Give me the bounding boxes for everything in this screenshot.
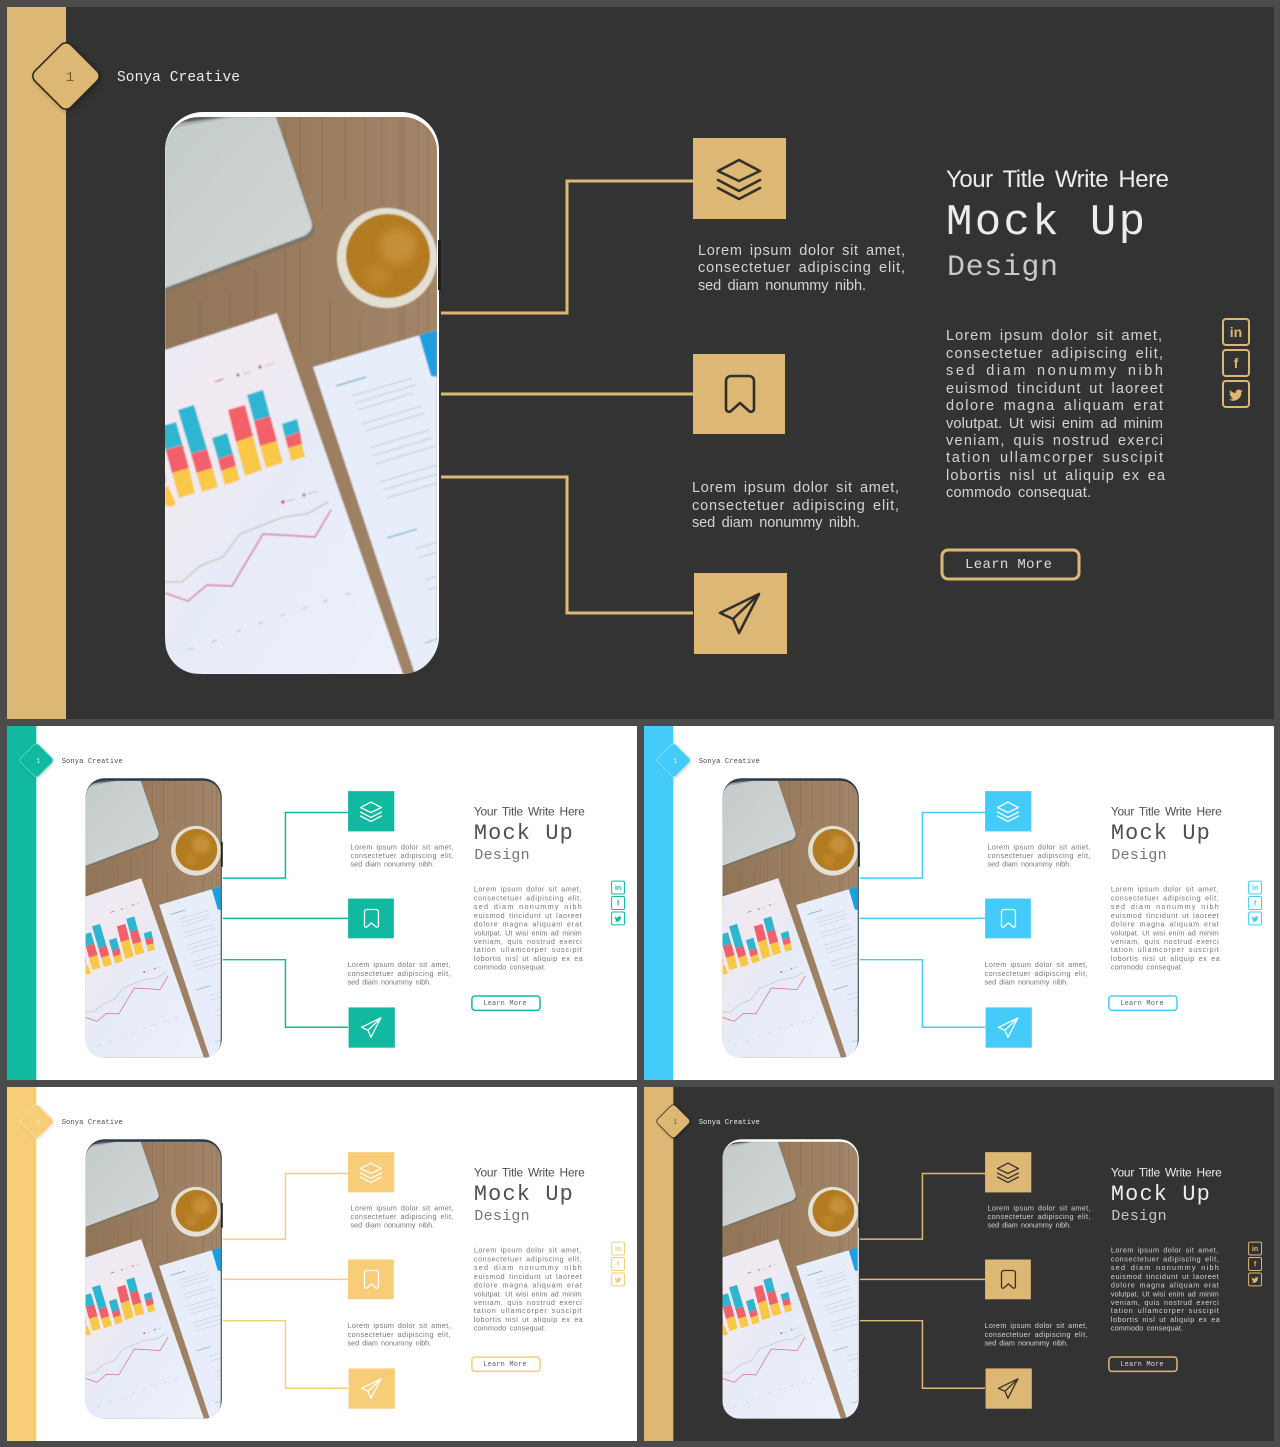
page number diamond [30,40,104,114]
connector bottom [223,960,348,1027]
caption bottom [692,480,899,531]
body paragraph: volutpat. Ut wisi enim ad minim [946,416,1163,432]
page number diamond [18,1103,55,1140]
body paragraph: commodo consequat. [1111,963,1183,972]
caption top: Lorem ipsum dolor sit amet, [988,842,1090,851]
social icon: facebook [1223,350,1249,376]
connector bottom [223,1321,348,1388]
body paragraph: dolore magna aliquam erat [946,398,1163,414]
icon box: paper plane [986,1368,1032,1409]
title line: Your Title Write Here [1111,1165,1222,1179]
body paragraph: Lorem ipsum dolor sit amet, [1111,885,1218,894]
caption bottom: Lorem ipsum dolor sit amet, [692,480,899,496]
connector middle [860,1278,985,1281]
body paragraph: sed diam nonummy nibh [946,363,1163,379]
page number diamond: 1 [673,758,677,766]
brand name: Sonya Creative [62,1119,123,1127]
icon box: paper plane [349,1007,395,1048]
icon box: paper plane [694,573,787,654]
body paragraph: volutpat. Ut wisi enim ad minim [474,1289,582,1298]
page number diamond [18,742,55,779]
caption bottom [985,960,1088,987]
learn more button: Learn More [483,1361,527,1369]
caption bottom: Lorem ipsum dolor sit amet, [348,1321,451,1330]
caption top: sed diam nonummy nibh. [351,1221,434,1230]
body paragraph: tation ullamcorper suscipit [1111,945,1219,954]
phone mockup with desk photo [83,778,223,1058]
connector middle [223,1278,348,1281]
body paragraph: commodo consequat. [474,1324,546,1333]
body paragraph: tation ullamcorper suscipit [1111,1306,1219,1315]
caption bottom [348,1321,451,1348]
social icon: facebook: f [1254,1261,1257,1268]
social icon: linkedin [612,1242,625,1255]
caption top: sed diam nonummy nibh. [988,860,1071,869]
social icon: linkedin [1249,881,1262,894]
social icon: linkedin: in [1252,885,1258,892]
caption bottom: Lorem ipsum dolor sit amet, [985,1321,1088,1330]
phone mockup with desk photo [720,778,860,1058]
caption bottom [985,1321,1088,1348]
page number diamond: 1 [66,70,74,86]
body paragraph: Lorem ipsum dolor sit amet, [474,885,581,894]
social icon: facebook: f [1254,900,1257,907]
caption top: Lorem ipsum dolor sit amet, [698,243,905,259]
caption bottom: sed diam nonummy nibh. [348,978,431,987]
caption bottom: sed diam nonummy nibh. [985,978,1068,987]
learn more button: Learn More [965,557,1052,573]
heading mock up: Mock Up [1111,1182,1210,1207]
caption top: Lorem ipsum dolor sit amet, [351,842,453,851]
left accent band [644,1087,673,1441]
subheading design: Design [1111,848,1167,864]
slide background [7,7,1274,719]
body paragraph: consectetuer adipiscing elit, [1111,1255,1219,1264]
social icon: linkedin: in [1252,1246,1258,1253]
panel: yellow thumbnail slide [7,1087,637,1441]
social icon: twitter [612,1273,625,1286]
icon box: bookmark [985,899,1031,938]
body paragraph: veniam, quis nostrud exerci [1111,1298,1219,1307]
panel: teal thumbnail slide [7,726,637,1080]
phone mockup with desk photo [159,112,441,674]
caption bottom: Lorem ipsum dolor sit amet, [985,960,1088,969]
icon box: bookmark [693,354,785,434]
caption bottom: consectetuer adipiscing elit, [985,1330,1088,1339]
body paragraph: veniam, quis nostrud exerci [474,937,582,946]
body paragraph: lobortis nisl ut aliquip ex ea [474,1315,583,1324]
connector top [860,1174,985,1239]
panel: blue thumbnail slide [644,726,1274,1080]
caption top [988,842,1090,869]
icon box: layers [985,1152,1031,1192]
icon box: bookmark [985,1260,1031,1299]
social icon: twitter [1249,912,1262,925]
social icon: facebook: f [617,900,620,907]
connector bottom [860,1321,985,1388]
page number diamond: 1 [673,1119,677,1127]
caption bottom: sed diam nonummy nibh. [692,515,860,531]
caption top: Lorem ipsum dolor sit amet, [351,1203,453,1212]
icon box: paper plane [986,1007,1032,1048]
brand name: Sonya Creative [62,758,123,766]
learn more button [1109,1357,1177,1371]
body paragraph: consectetuer adipiscing elit, [474,894,582,903]
connector top [441,181,693,313]
social icon: facebook: f [1234,355,1239,371]
social icon: facebook [1249,897,1262,909]
social icon: twitter [1249,1273,1262,1286]
body paragraph: euismod tincidunt ut laoreet [474,911,582,920]
caption top: consectetuer adipiscing elit, [351,1212,453,1221]
icon box: layers [693,138,786,219]
caption bottom: sed diam nonummy nibh. [985,1339,1068,1348]
caption top: sed diam nonummy nibh. [698,278,866,294]
body paragraph: veniam, quis nostrud exerci [946,433,1163,449]
social icon: linkedin: in [615,885,621,892]
body paragraph [474,1246,583,1333]
heading mock up: Mock Up [474,821,573,846]
social icon: linkedin [1249,1242,1262,1255]
page number diamond: 1 [36,758,40,766]
slide background [644,726,1274,1080]
learn more button [472,1357,540,1371]
left accent band [7,726,36,1080]
connector top [223,813,348,878]
body paragraph: consectetuer adipiscing elit, [474,1255,582,1264]
body paragraph: euismod tincidunt ut laoreet [1111,1272,1219,1281]
caption bottom: Lorem ipsum dolor sit amet, [348,960,451,969]
body paragraph: Lorem ipsum dolor sit amet, [1111,1246,1218,1255]
icon box: paper plane [349,1368,395,1409]
body paragraph: consectetuer adipiscing elit, [946,346,1163,362]
body paragraph: tation ullamcorper suscipit [946,450,1163,466]
social icon: facebook [1249,1258,1262,1270]
social icon: twitter [612,912,625,925]
slide background [7,726,637,1080]
social icon: facebook [612,1258,625,1270]
social icon: linkedin: in [1230,324,1242,340]
social icon: facebook: f [617,1261,620,1268]
icon box: bookmark [348,1260,394,1299]
caption top: consectetuer adipiscing elit, [988,851,1090,860]
body paragraph [1111,885,1220,972]
learn more button: Learn More [483,1000,527,1008]
icon box: layers [985,791,1031,831]
subheading design: Design [947,251,1058,285]
panel: dark thumbnail slide [644,1087,1274,1441]
caption top [351,842,453,869]
title line: Your Title Write Here [946,166,1169,193]
caption bottom: consectetuer adipiscing elit, [692,498,899,514]
connector middle [223,917,348,920]
social icon: linkedin: in [615,1246,621,1253]
caption top: Lorem ipsum dolor sit amet, [988,1203,1090,1212]
caption top: sed diam nonummy nibh. [988,1221,1071,1230]
icon box: layers [348,1152,394,1192]
caption bottom: sed diam nonummy nibh. [348,1339,431,1348]
slide background [7,1087,637,1441]
subheading design: Design [1111,1209,1167,1225]
body paragraph: dolore magna aliquam erat [1111,919,1219,928]
panel: main dark gold slide [7,7,1274,719]
caption top: sed diam nonummy nibh. [351,860,434,869]
body paragraph: commodo consequat. [474,963,546,972]
connector middle [441,392,693,396]
body paragraph: tation ullamcorper suscipit [474,945,582,954]
learn more button [942,550,1079,579]
caption bottom: consectetuer adipiscing elit, [985,969,1088,978]
left accent band [7,1087,36,1441]
body paragraph: volutpat. Ut wisi enim ad minim [474,928,582,937]
caption bottom: consectetuer adipiscing elit, [348,1330,451,1339]
body paragraph: dolore magna aliquam erat [1111,1280,1219,1289]
left accent band [7,7,66,719]
slide background [644,1087,1274,1441]
learn more button [1109,996,1177,1010]
social icon: linkedin [1223,319,1249,345]
caption top: consectetuer adipiscing elit, [698,260,905,276]
subheading design: Design [474,848,530,864]
page number diamond [655,1103,692,1140]
connector middle [860,917,985,920]
brand name: Sonya Creative [699,1119,760,1127]
body paragraph: euismod tincidunt ut laoreet [946,381,1163,397]
brand name: Sonya Creative [699,758,760,766]
left accent band [644,726,673,1080]
icon box: layers [348,791,394,831]
body paragraph: veniam, quis nostrud exerci [474,1298,582,1307]
body paragraph: euismod tincidunt ut laoreet [1111,911,1219,920]
social icon: twitter [1223,381,1249,407]
body paragraph: dolore magna aliquam erat [474,919,582,928]
body paragraph: lobortis nisl ut aliquip ex ea [946,468,1166,484]
body paragraph: tation ullamcorper suscipit [474,1306,582,1315]
body paragraph: lobortis nisl ut aliquip ex ea [1111,954,1220,963]
caption top [988,1203,1090,1230]
learn more button: Learn More [1120,1361,1164,1369]
body paragraph [946,328,1166,501]
social icon: linkedin [612,881,625,894]
body paragraph [474,885,583,972]
subheading design: Design [474,1209,530,1225]
caption top: consectetuer adipiscing elit, [351,851,453,860]
body paragraph: sed diam nonummy nibh [1111,902,1219,911]
caption top [351,1203,453,1230]
body paragraph: sed diam nonummy nibh [1111,1263,1219,1272]
body paragraph: lobortis nisl ut aliquip ex ea [1111,1315,1220,1324]
title line: Your Title Write Here [474,1165,585,1179]
phone mockup with desk photo [720,1139,860,1419]
learn more button [472,996,540,1010]
body paragraph: Lorem ipsum dolor sit amet, [474,1246,581,1255]
caption top: consectetuer adipiscing elit, [988,1212,1090,1221]
learn more button: Learn More [1120,1000,1164,1008]
connector bottom [860,960,985,1027]
body paragraph: consectetuer adipiscing elit, [1111,894,1219,903]
body paragraph: volutpat. Ut wisi enim ad minim [1111,1289,1219,1298]
body paragraph: sed diam nonummy nibh [474,902,582,911]
page number diamond [655,742,692,779]
body paragraph: commodo consequat. [946,485,1091,501]
body paragraph [1111,1246,1220,1333]
connector top [860,813,985,878]
body paragraph: euismod tincidunt ut laoreet [474,1272,582,1281]
heading mock up: Mock Up [474,1182,573,1207]
caption bottom [348,960,451,987]
connector top [223,1174,348,1239]
phone mockup with desk photo [83,1139,223,1419]
heading mock up: Mock Up [946,198,1145,248]
social icon: facebook [612,897,625,909]
caption top [698,243,905,294]
body paragraph: volutpat. Ut wisi enim ad minim [1111,928,1219,937]
body paragraph: sed diam nonummy nibh [474,1263,582,1272]
body paragraph: veniam, quis nostrud exerci [1111,937,1219,946]
body paragraph: dolore magna aliquam erat [474,1280,582,1289]
caption bottom: consectetuer adipiscing elit, [348,969,451,978]
body paragraph: lobortis nisl ut aliquip ex ea [474,954,583,963]
icon box: bookmark [348,899,394,938]
title line: Your Title Write Here [1111,804,1222,818]
page number diamond: 1 [36,1119,40,1127]
body paragraph: commodo consequat. [1111,1324,1183,1333]
brand name: Sonya Creative [117,70,240,86]
title line: Your Title Write Here [474,804,585,818]
heading mock up: Mock Up [1111,821,1210,846]
body paragraph: Lorem ipsum dolor sit amet, [946,328,1162,344]
connector bottom [441,477,693,613]
